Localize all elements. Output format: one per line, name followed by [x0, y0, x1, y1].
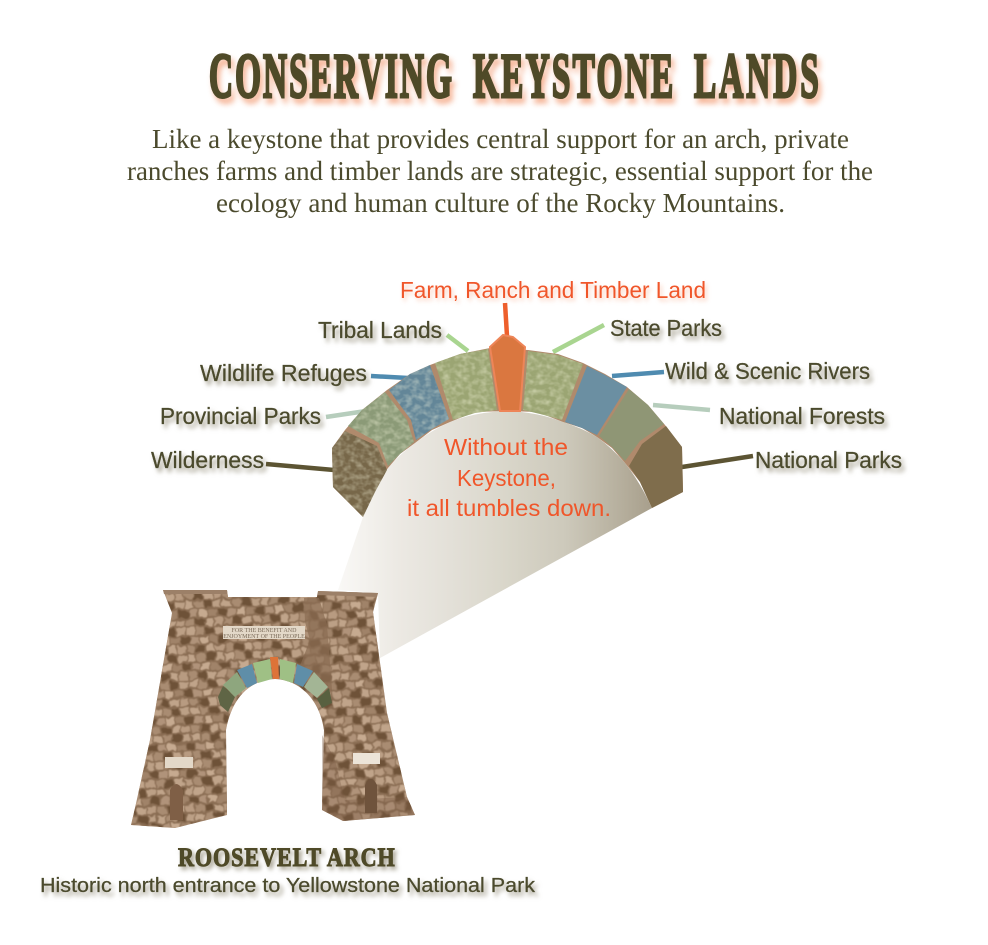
inscription plaque — [223, 626, 305, 640]
national parks stone — [629, 426, 683, 508]
arch labels: Wilderness — [151, 447, 264, 473]
title text: LANDS — [694, 42, 819, 112]
callout: without the keystone: it all tumbles down. — [407, 495, 611, 521]
wild and scenic rivers stone — [565, 366, 627, 435]
doors — [170, 784, 183, 820]
lintel and pillar shadow — [296, 598, 332, 708]
callout: without the keystone: Without the — [444, 434, 568, 460]
wildlife refuges stone — [389, 365, 449, 440]
roosevelt arch heading: ROOSEVELT ARCH — [178, 844, 395, 872]
arch labels: National Parks — [755, 447, 902, 473]
small coloured arch stones — [218, 657, 332, 712]
national forests stone — [599, 389, 664, 461]
large arch — [332, 335, 683, 517]
state parks stone — [523, 351, 583, 420]
arch labels: Farm, Ranch and Timber Land — [400, 277, 706, 303]
arch labels: Wildlife Refuges — [200, 360, 367, 386]
title text — [209, 42, 819, 112]
title glow: CONSERVING — [212, 47, 455, 117]
provincial parks stone — [348, 392, 414, 466]
callout: without the keystone — [407, 434, 611, 521]
arch labels: Provincial Parks — [160, 403, 321, 429]
textured left stones — [332, 349, 583, 517]
cornice bands — [163, 590, 378, 597]
title glow: LANDS — [697, 47, 822, 117]
intro text: ecology and human culture of the Rocky Mountains. — [216, 188, 785, 218]
arch labels: State Parks — [610, 315, 722, 341]
arch labels: National Forests — [719, 403, 885, 429]
keystone — [490, 335, 525, 411]
title text: KEYSTONE — [473, 42, 673, 112]
tribal lands stone — [435, 349, 497, 420]
title glow: KEYSTONE — [476, 47, 676, 117]
arch labels — [151, 277, 902, 473]
title — [209, 42, 822, 117]
leader lines — [266, 303, 753, 470]
roosevelt arch caption: Historic north entrance to Yellowstone National Park — [40, 875, 536, 897]
right pillar base shadow — [322, 735, 415, 821]
arch labels: Tribal Lands — [318, 317, 442, 343]
arch masonry — [131, 590, 415, 828]
inscription plaque: ENJOYMENT OF THE PEOPLE — [223, 634, 305, 640]
title glow — [212, 47, 822, 117]
side plaques — [165, 757, 193, 768]
title text: CONSERVING — [209, 42, 452, 112]
gradient fan from small arch to large arch — [338, 411, 652, 658]
arch labels: Wild & Scenic Rivers — [665, 358, 870, 384]
mortar base — [332, 348, 683, 517]
intro text: Like a keystone that provides central support for an arch, private — [152, 124, 849, 154]
inscription plaque: FOR THE BENEFIT AND — [232, 628, 297, 634]
wilderness stone — [332, 431, 387, 517]
roosevelt arch illustration — [131, 590, 415, 828]
intro text — [127, 124, 873, 218]
intro text: ranches farms and timber lands are strategic, essential support for the — [127, 156, 873, 186]
callout: without the keystone: Keystone, — [457, 465, 556, 491]
